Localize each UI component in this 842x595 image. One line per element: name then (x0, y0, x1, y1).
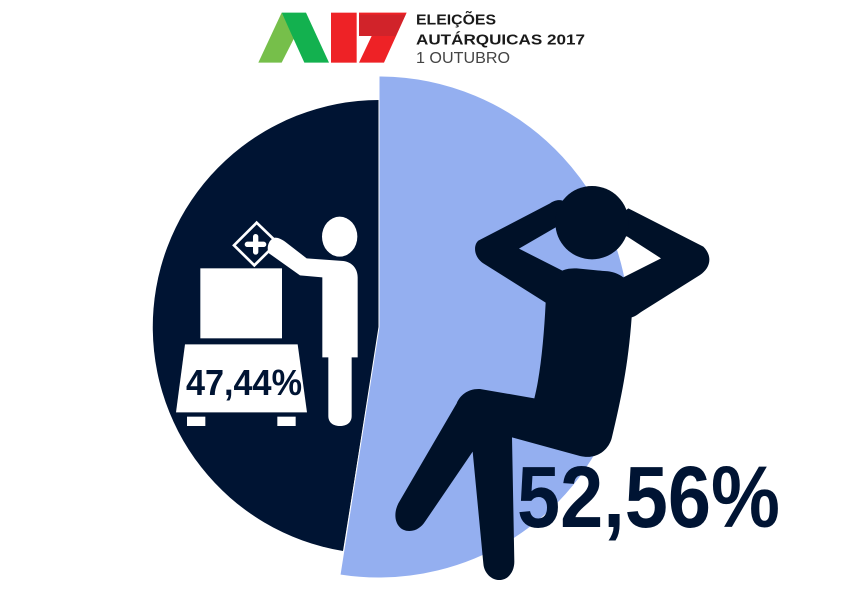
pie slice: voters 47,44% (153, 100, 379, 551)
pie chart (153, 76, 630, 578)
logo: AL17 election mark and title (258, 10, 585, 67)
ballot box (200, 268, 282, 338)
value: 52,56%: 52,56% (517, 449, 780, 546)
value: 47,44%: 47,44% (186, 362, 302, 403)
ballot paper (234, 223, 277, 265)
logo text: 1 OUTUBRO (416, 50, 510, 67)
logo text: AUTÁRQUICAS 2017 (416, 32, 585, 49)
logo mark (258, 13, 407, 63)
icon: voter at ballot box (176, 217, 358, 426)
voter body (268, 238, 358, 426)
logo text (416, 10, 585, 67)
logo text: ELEIÇÕES (416, 10, 496, 28)
pie slice: abstention 52,56% (340, 76, 630, 578)
table (176, 344, 307, 412)
icon: relaxed seated person (395, 186, 709, 580)
voter head (322, 217, 357, 257)
table feet (187, 417, 296, 426)
